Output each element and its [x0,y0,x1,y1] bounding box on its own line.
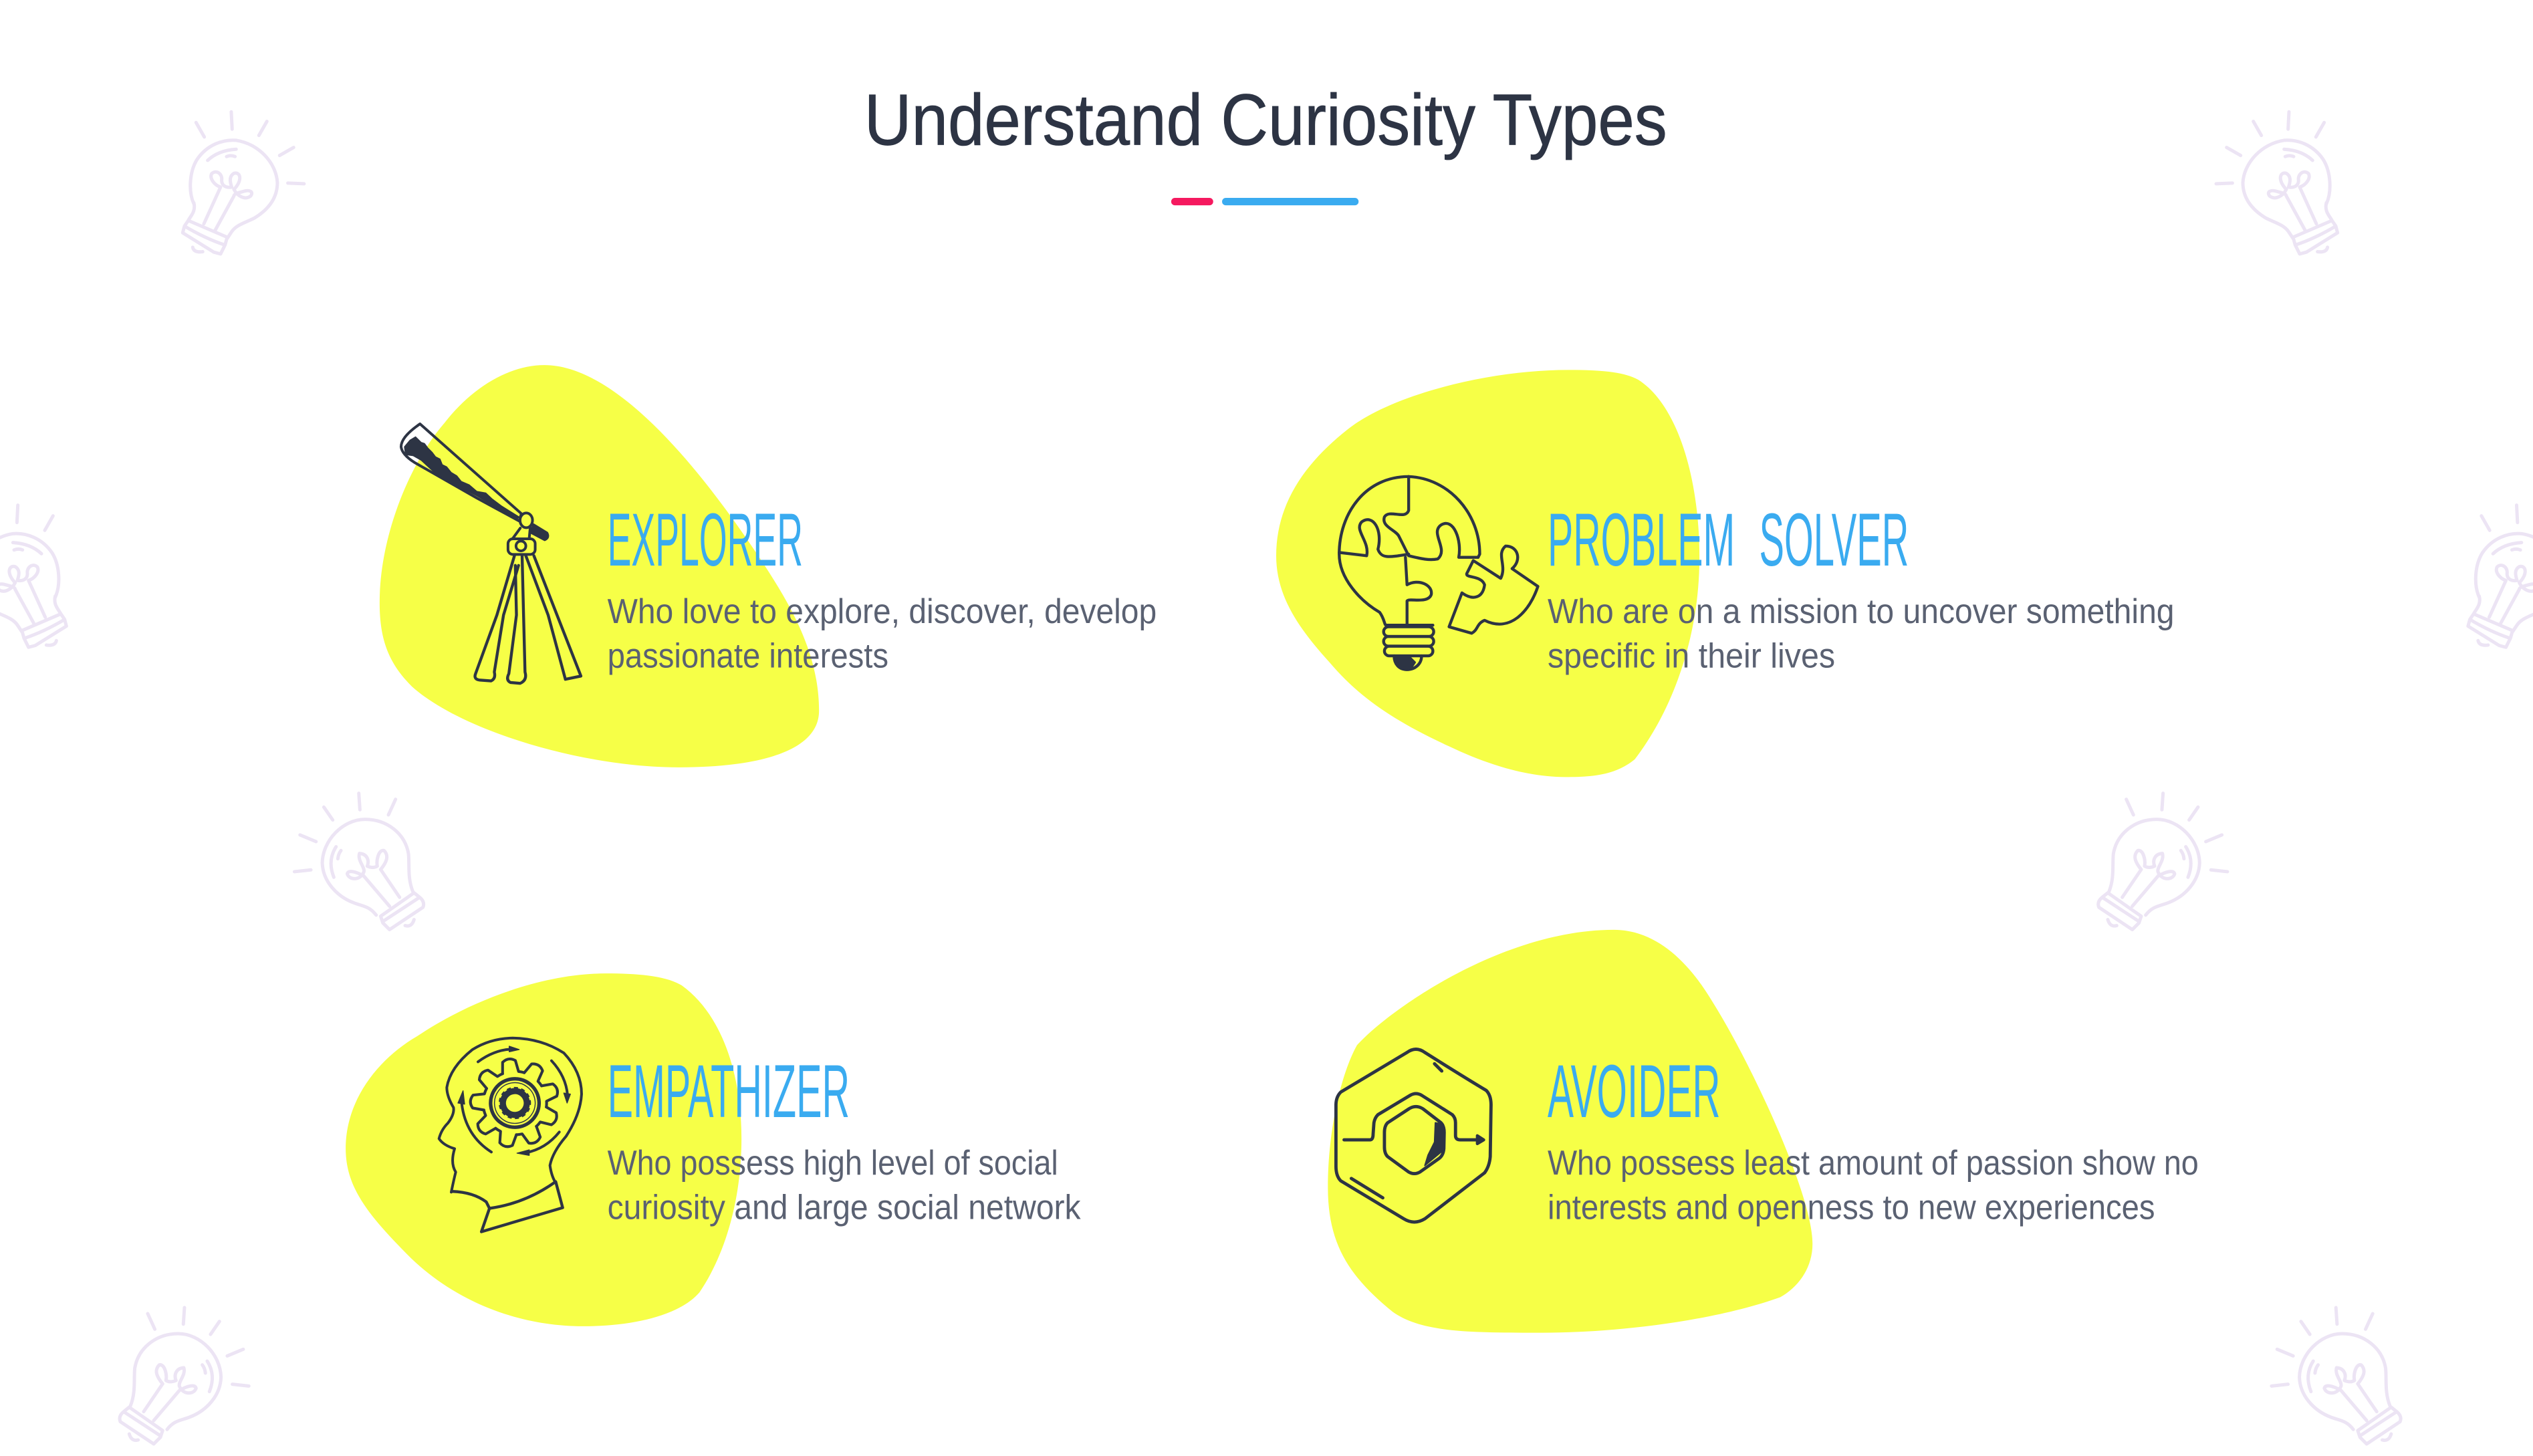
explorer description: Who love to explore, discover, develop [608,592,1157,631]
background lightbulb center left [294,794,424,930]
background lightbulb top right [2216,112,2338,254]
background lightbulb center right [2098,794,2227,930]
background lightbulb bottom right [2272,1308,2401,1444]
background lightbulb bottom left [120,1308,249,1444]
empathizer heading: EMPATHIZER [608,1049,850,1133]
avoider description: interests and openness to new experiences [1548,1189,2155,1227]
icon: head with gear [439,1038,582,1232]
panel: problem solver: SOLVER [1760,497,1909,582]
icon: avoidance hexagon [1336,1050,1491,1222]
empathizer yellow blob [346,973,741,1326]
explorer yellow blob [380,365,819,767]
explorer description: passionate interests [608,637,888,676]
avoider yellow blob [1328,930,1812,1333]
background lightbulb top left [183,112,304,254]
icon: telescope [401,424,581,683]
title: Understand Curiosity Types [864,80,1667,161]
problem solver heading: PROBLEM [1548,497,1735,582]
avoider heading: AVOIDER [1548,1049,1721,1133]
background lightbulb middle right edge [2468,505,2533,647]
problem solver description [1548,592,2175,676]
problem solver description: Who are on a mission to uncover something [1548,592,2175,631]
panel: avoider [1328,930,2199,1333]
empathizer description: curiosity and large social network [608,1189,1082,1227]
title underline [1171,198,1358,205]
problem solver description: specific in their lives [1548,637,1835,676]
avoider description [1548,1144,2199,1227]
panel: explorer [380,365,1157,767]
avoider description: Who possess least amount of passion show no [1548,1144,2199,1183]
empathizer description: Who possess high level of social [608,1144,1058,1183]
panel: explorer: EXPLORER [608,497,803,582]
explorer description [608,592,1157,676]
problem solver yellow blob [1276,370,1699,777]
background lightbulb middle left edge [0,505,66,647]
panel: empathizer [346,973,1082,1326]
panel: problem solver [1276,370,2175,777]
icon: puzzle lightbulb [1339,477,1538,670]
empathizer description [608,1144,1082,1227]
